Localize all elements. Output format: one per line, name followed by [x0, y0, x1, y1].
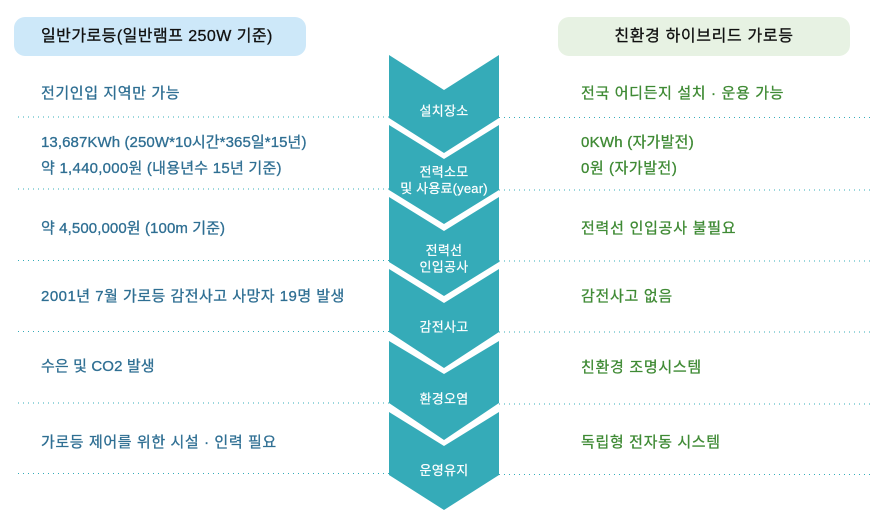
right text: installation: 전국 어디든지 설치 · 운용 가능 — [581, 85, 784, 102]
chevron: pollution — [389, 341, 499, 440]
chevron: power line work: 전력선 — [426, 243, 462, 258]
left text: installation: 전기인입 지역만 가능 — [41, 85, 180, 102]
right text: line work: 전력선 인입공사 불필요 — [581, 220, 736, 237]
left text: maintenance: 가로등 제어를 위한 시설 · 인력 필요 — [41, 434, 277, 451]
chevron: pollution: 환경오염 — [419, 392, 469, 406]
chevron: installation site: 설치장소 — [419, 104, 469, 118]
heading: conventional street light: 일반가로등(일반램프 250W 기준) — [41, 28, 273, 45]
right text: maintenance: 독립형 전자동 시스템 — [581, 434, 721, 451]
left text: power consumption: 13,687KWh (250W*10시간*365일*15년) — [41, 134, 307, 151]
chevron: installation site — [389, 55, 499, 153]
left text: accidents: 2001년 7월 가로등 감전사고 사망자 19명 발생 — [41, 288, 345, 305]
heading: eco hybrid street light: 친환경 하이브리드 가로등 — [614, 28, 794, 45]
chevron: operation and maintenance — [389, 412, 499, 510]
chevron: operation and maintenance: 운영유지 — [419, 463, 469, 478]
chevron: electric shock accidents: 감전사고 — [419, 320, 469, 334]
left text: power fee: 약 1,440,000원 (내용년수 15년 기준) — [41, 160, 282, 177]
right text: power fee: 0원 (자가발전) — [581, 160, 677, 177]
chevron: power line work — [389, 197, 499, 296]
heading: eco hybrid street light — [558, 17, 850, 56]
right text: accidents: 감전사고 없음 — [581, 288, 673, 305]
left text: pollution: 수은 및 CO2 발생 — [41, 358, 155, 375]
right text: power consumption: 0KWh (자가발전) — [581, 134, 694, 151]
left text: line work: 약 4,500,000원 (100m 기준) — [41, 220, 225, 237]
chevron: power line work: 인입공사 — [419, 260, 469, 274]
heading: conventional street light — [14, 17, 306, 56]
chevron: power use and fee — [389, 125, 499, 224]
right text: pollution: 친환경 조명시스템 — [581, 359, 702, 376]
chevron: power use and fee: 전력소모 — [419, 164, 469, 180]
chevron: power use and fee: 및 사용료(year) — [400, 181, 488, 196]
chevron: electric shock accidents — [389, 269, 499, 368]
